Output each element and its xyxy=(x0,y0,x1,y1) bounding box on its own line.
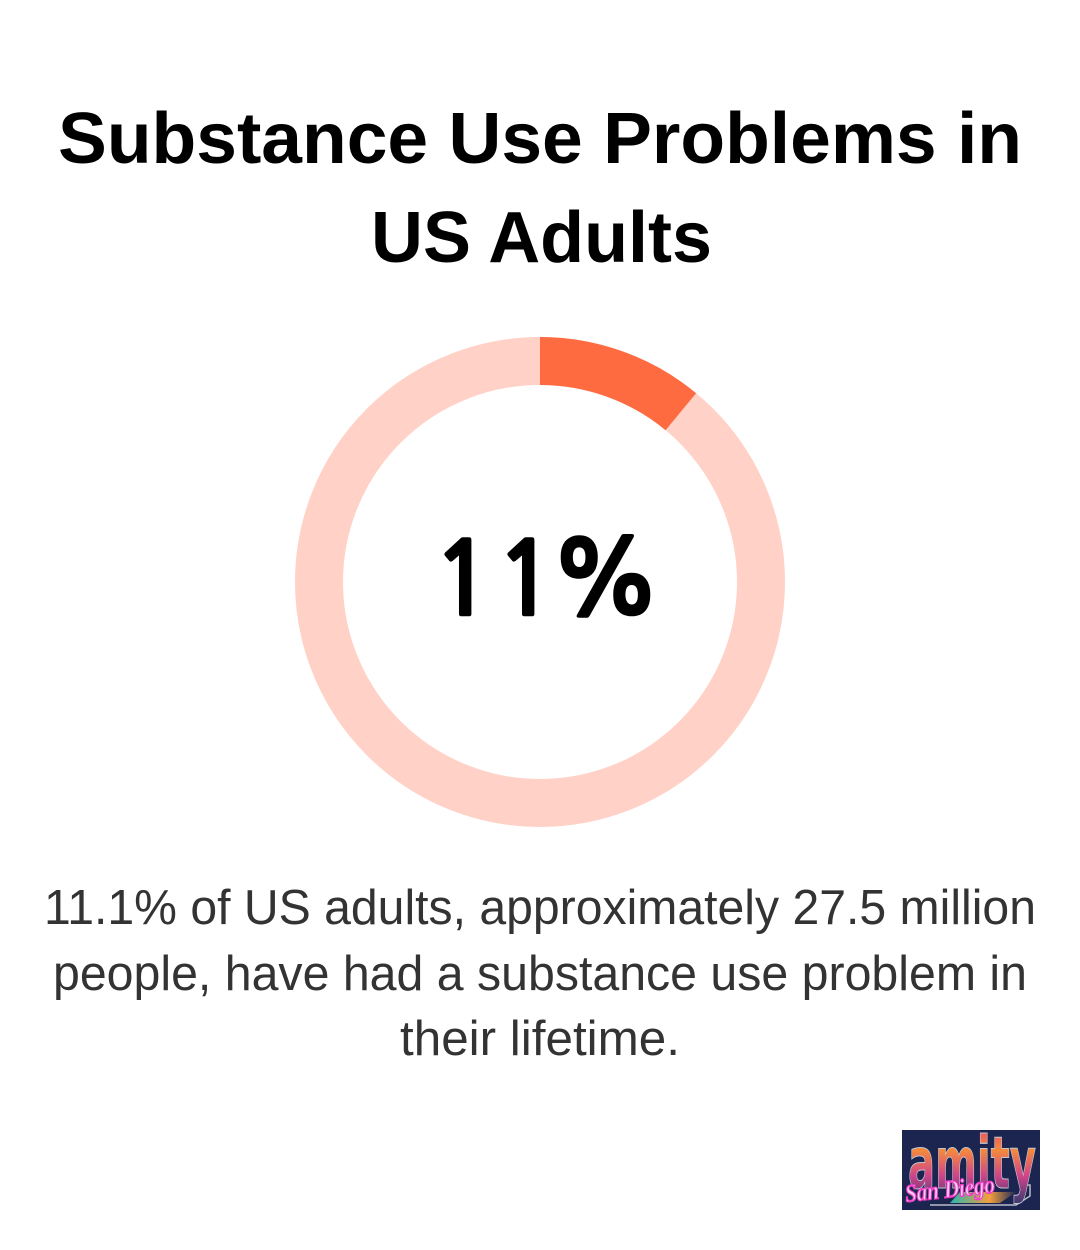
title: US Adults xyxy=(371,198,712,278)
donut centre value: 11% xyxy=(432,530,661,631)
donut chart: 11% xyxy=(319,337,761,803)
description text xyxy=(44,881,1036,1066)
donut highlighted segment xyxy=(540,337,696,430)
description text: 11.1% of US adults, approximately 27.5 million xyxy=(44,881,1036,935)
title: Substance Use Problems in xyxy=(58,99,1022,179)
logo outline xyxy=(930,1185,1030,1205)
title xyxy=(58,99,1022,278)
logo script: San Diego xyxy=(904,1172,996,1208)
beach strip xyxy=(950,1192,1016,1203)
description text: people, have had a substance use problem in xyxy=(53,947,1027,1001)
logo wordmark: amity xyxy=(908,1120,1036,1205)
description text: their lifetime. xyxy=(400,1012,680,1066)
logo: Amity San Diego xyxy=(902,1120,1040,1210)
donut track xyxy=(319,361,761,803)
